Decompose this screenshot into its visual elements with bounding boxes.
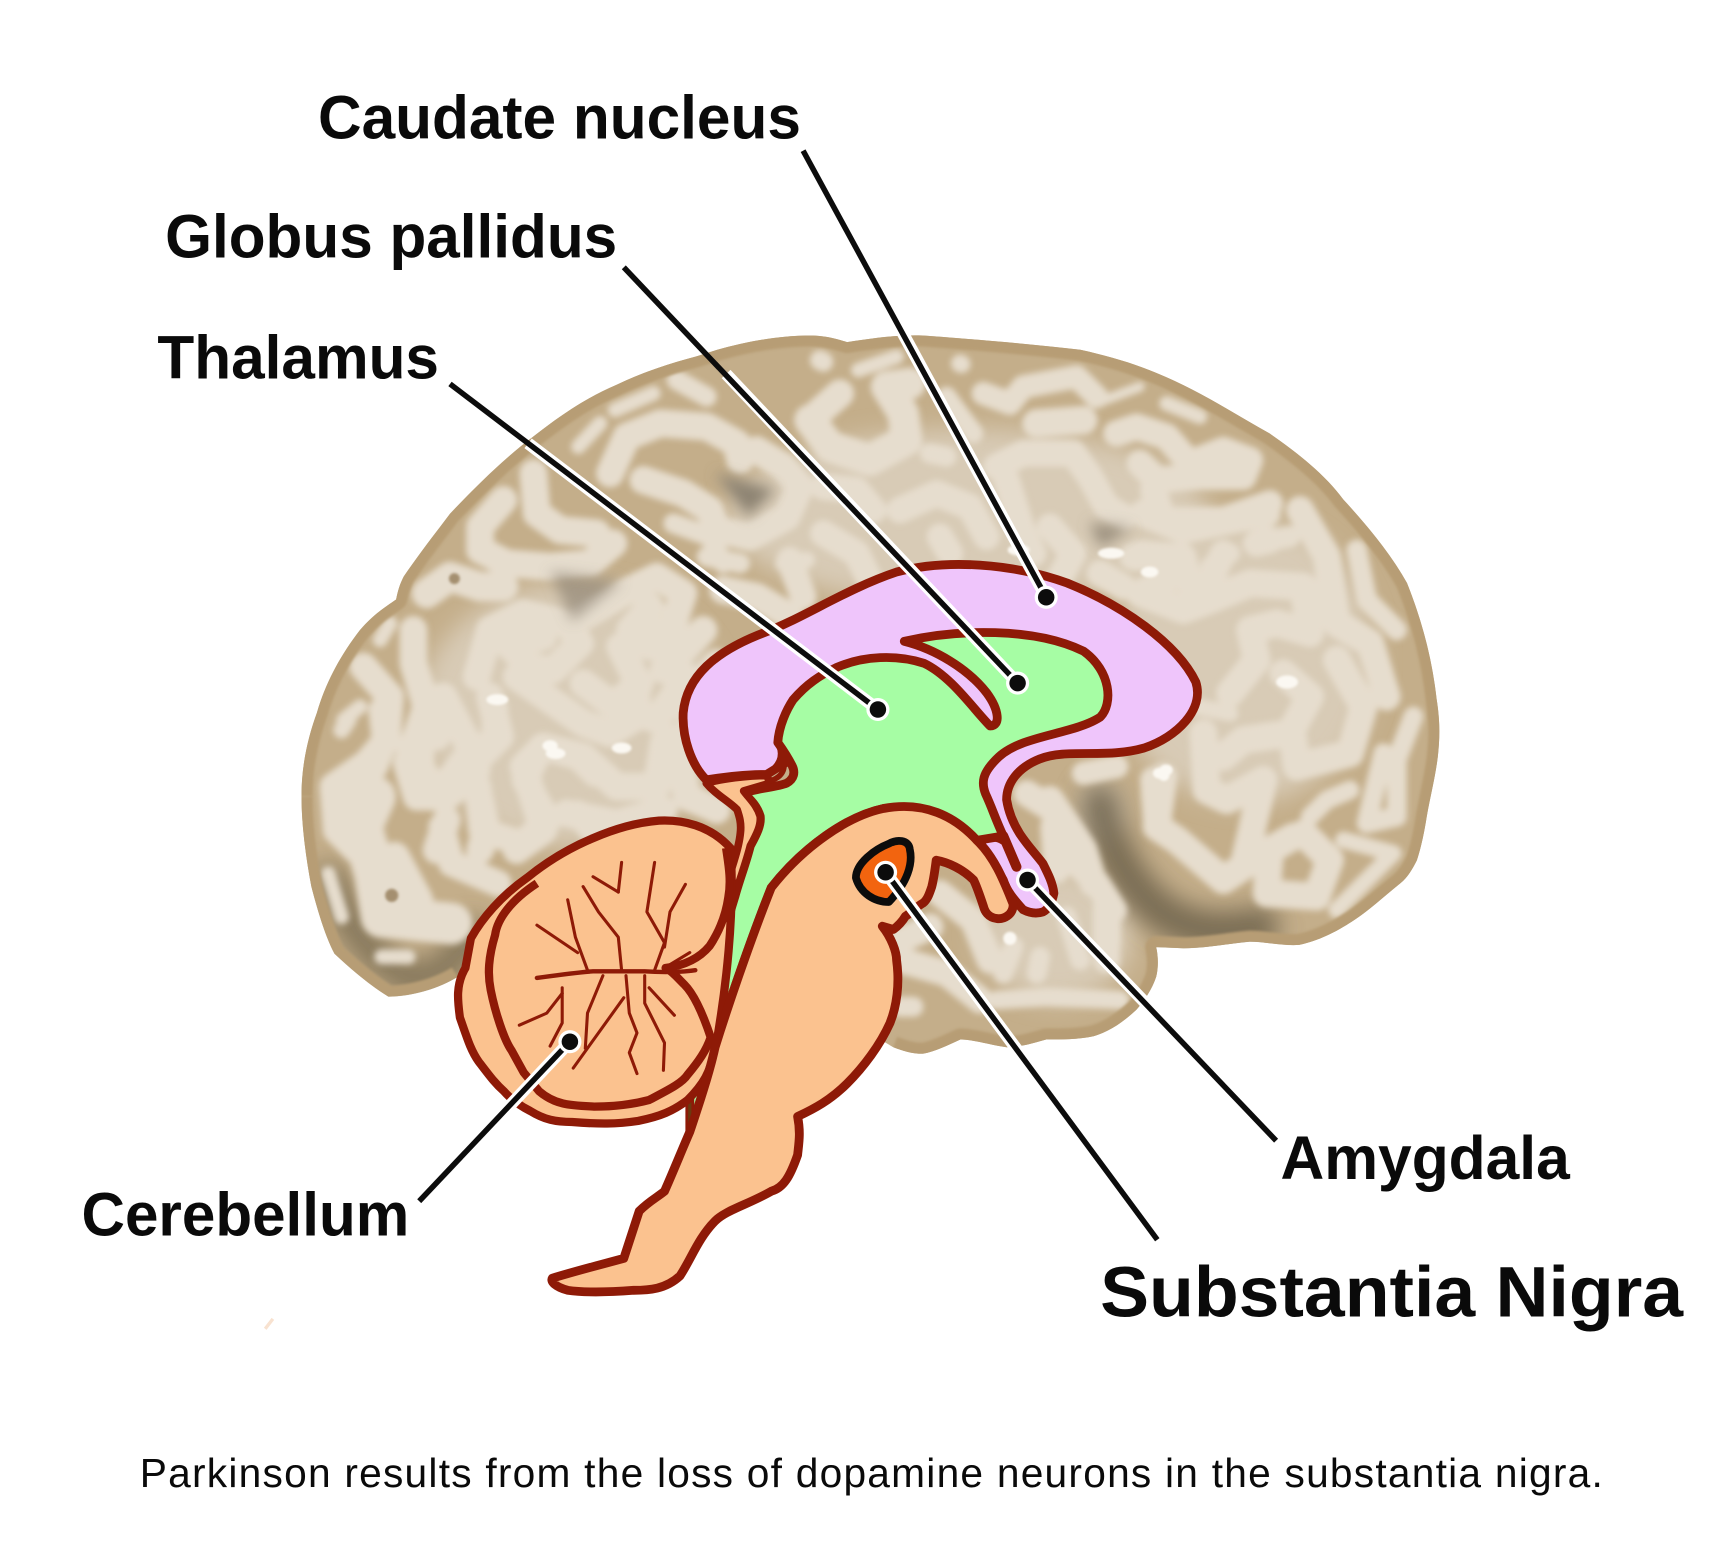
gyri: lower left lobe xyxy=(328,707,595,957)
dark fold spots xyxy=(385,573,460,902)
dark fold shadows xyxy=(550,473,1133,622)
label: globus pallidus: Globus pallidus xyxy=(165,202,617,271)
cerebellum veins xyxy=(519,862,695,1074)
small faint mark xyxy=(265,1319,273,1329)
peduncle strip xyxy=(706,776,770,896)
cerebellum xyxy=(458,820,732,1124)
leader line: caudate nucleus xyxy=(803,151,1058,609)
label: thalamus: Thalamus xyxy=(157,323,439,392)
label: substantia nigra: Substantia Nigra xyxy=(1100,1253,1684,1333)
label: caudate nucleus: Caudate nucleus xyxy=(318,84,801,153)
gyri highlights xyxy=(486,544,1298,945)
leader line: globus pallidus xyxy=(624,267,1029,695)
label: cerebellum: Cerebellum xyxy=(82,1180,409,1249)
brain rim xyxy=(302,335,1439,1054)
gyri: top centre and top right xyxy=(790,357,1270,597)
brain: cerebrum xyxy=(302,335,1439,1054)
brain shading xyxy=(330,803,1260,979)
leader line: cerebellum xyxy=(419,1030,581,1201)
gyri folds xyxy=(328,357,1413,1007)
thalamus and globus pallidus (green) xyxy=(690,632,1108,1133)
brain central lighter wash xyxy=(418,429,1375,1001)
caption: Parkinson results from the loss of dopamine neurons in the substantia nigra. xyxy=(140,1450,1603,1496)
leader line: thalamus xyxy=(450,384,889,721)
substantia nigra marker xyxy=(856,841,911,902)
brainstem xyxy=(552,807,1013,1292)
caudate nucleus and amygdala (purple) xyxy=(683,564,1197,913)
gyri: upper left xyxy=(333,380,807,850)
gyri: right lobe xyxy=(1050,510,1413,943)
leader line: amygdala xyxy=(1016,868,1276,1141)
label: amygdala: Amygdala xyxy=(1281,1124,1571,1193)
leader line: substantia nigra xyxy=(874,861,1157,1240)
gyri: temporal lobe xyxy=(900,780,1157,1007)
